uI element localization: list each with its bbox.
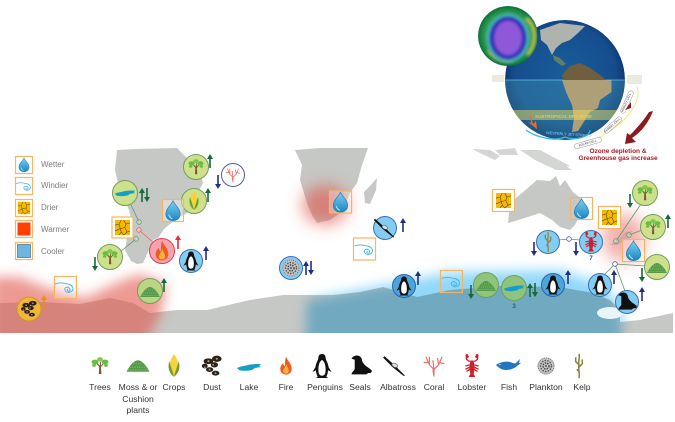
key: crops xyxy=(163,354,185,392)
circulation cell pills: HADLEY CELL xyxy=(620,92,632,113)
key: fire: Fire xyxy=(279,382,294,392)
warm glow: New Zealand xyxy=(602,214,646,262)
New Zealand xyxy=(610,231,632,245)
fire up xyxy=(150,235,181,264)
ice shelf highlights xyxy=(597,307,623,319)
lake up and down xyxy=(502,276,538,300)
legend xyxy=(16,156,69,260)
connector node: marine xyxy=(613,262,617,266)
key: dust: Dust xyxy=(203,382,221,392)
key: seals xyxy=(349,356,372,392)
trees down xyxy=(92,244,122,271)
label: westerly jet: WESTERLY JET STREAM xyxy=(546,131,591,138)
trees down xyxy=(627,180,658,208)
drier box: Tasman xyxy=(598,206,620,228)
wetter box xyxy=(330,191,352,213)
crops up xyxy=(182,188,211,214)
key: lobster: Lobster xyxy=(458,382,486,392)
drier box xyxy=(112,217,133,238)
landmass: Madagascar xyxy=(364,178,377,204)
legend: drier: Drier xyxy=(41,203,59,212)
key: trees xyxy=(89,357,111,392)
key: trees: Trees xyxy=(89,382,111,392)
key: fire xyxy=(279,356,294,392)
wetter box: New Zealand xyxy=(622,240,644,262)
penguins up xyxy=(588,270,617,296)
globe sphere xyxy=(505,20,625,140)
species key xyxy=(89,354,591,415)
moss down xyxy=(468,272,498,299)
label: subtropical dry zone: SUBTROPICAL DRY ZONE xyxy=(535,114,592,119)
landmass: South America xyxy=(115,148,203,264)
cooling zone: East Antarctic xyxy=(305,270,622,345)
key: lake: Lake xyxy=(240,382,259,392)
landmass: Africa xyxy=(295,148,368,223)
South America impacts xyxy=(17,154,244,321)
lake up and down xyxy=(112,180,150,206)
dark red arrow xyxy=(625,111,653,144)
orange arrow xyxy=(528,113,537,129)
landmass: Antarctica xyxy=(0,286,673,333)
key: kelp xyxy=(573,354,591,392)
key: albatross xyxy=(380,357,416,392)
windier box xyxy=(440,270,462,292)
subtropical dry zone band xyxy=(513,110,617,120)
circulation cell pills: POLAR CELL xyxy=(578,138,597,148)
key: lake xyxy=(237,364,261,392)
circulation cell pills: FERREL CELL xyxy=(604,117,621,133)
legend: wetter: Wetter xyxy=(41,160,65,169)
lobster down xyxy=(573,230,602,256)
connector node: trees xyxy=(614,239,618,243)
circulation cell pills xyxy=(492,75,642,149)
connector: fire xyxy=(139,230,155,244)
key: moss and cushion plants xyxy=(119,360,157,415)
South America on globe xyxy=(562,63,612,132)
key: penguins: Penguins xyxy=(307,382,343,392)
albatross up xyxy=(374,216,406,240)
penguins up xyxy=(180,246,209,272)
trees up xyxy=(184,154,213,180)
coral down xyxy=(215,164,244,189)
legend: cooler: Cooler xyxy=(41,247,65,256)
note 3: 3 xyxy=(512,304,516,310)
key: penguins xyxy=(307,354,343,392)
jet stream line xyxy=(526,130,590,139)
connector lines xyxy=(558,204,645,291)
windier box xyxy=(354,238,376,260)
warm glow: West Antarctic xyxy=(0,274,166,345)
caption: greenhouse gas: Greenhouse gas increase xyxy=(578,155,658,162)
key: coral xyxy=(424,357,444,392)
world map with climate zones xyxy=(0,148,673,345)
Australia and New Zealand impacts xyxy=(468,180,671,314)
connector node: fire xyxy=(137,228,141,232)
wetter box xyxy=(162,200,184,222)
connector node: trees east xyxy=(627,233,631,237)
plankton up and down xyxy=(280,256,314,280)
kelp down xyxy=(531,230,560,256)
wetter box: east Australia xyxy=(570,198,592,220)
key: seals: Seals xyxy=(349,382,371,392)
dust up xyxy=(17,295,47,321)
legend: windier: Windier xyxy=(41,181,68,190)
connector node: trees xyxy=(134,237,138,241)
Africa and Indian Ocean impacts xyxy=(280,191,462,298)
key: moss and cushion plants: Moss & or xyxy=(119,382,157,392)
North America xyxy=(540,23,585,55)
key: plankton: Plankton xyxy=(529,382,563,392)
key: dust xyxy=(202,356,222,392)
caption: ozone depletion: Ozone depletion & xyxy=(589,148,647,155)
moss down xyxy=(639,254,670,282)
key: albatross: Albatross xyxy=(380,382,416,392)
windier box xyxy=(54,276,76,298)
seals up xyxy=(616,287,645,314)
key: plankton xyxy=(529,358,563,392)
penguins up xyxy=(392,271,421,298)
legend: warmer: Warmer xyxy=(41,225,69,234)
key: fish: Fish xyxy=(501,382,517,392)
key: moss and cushion plants: plants xyxy=(127,405,149,415)
moss up xyxy=(138,278,167,304)
landmass: Indonesia xyxy=(472,148,572,170)
key: fish xyxy=(496,359,521,392)
landmass: Australia xyxy=(508,176,583,230)
key: coral: Coral xyxy=(424,382,444,392)
key: kelp: Kelp xyxy=(573,382,591,392)
connector node: lake xyxy=(137,220,141,224)
globe illustration xyxy=(478,6,658,162)
drier box: west Australia xyxy=(492,190,514,212)
ozone hole map xyxy=(478,6,538,66)
connectors xyxy=(120,205,139,252)
trees up xyxy=(640,214,671,240)
key: moss and cushion plants: Cushion xyxy=(122,394,154,404)
note 7: 7 xyxy=(589,256,593,262)
key: crops: Crops xyxy=(163,382,185,392)
warm glow: southern Africa xyxy=(302,185,348,225)
connector node: kelp and lobster xyxy=(567,237,571,241)
key: lobster xyxy=(458,354,486,392)
penguins up xyxy=(542,270,571,296)
